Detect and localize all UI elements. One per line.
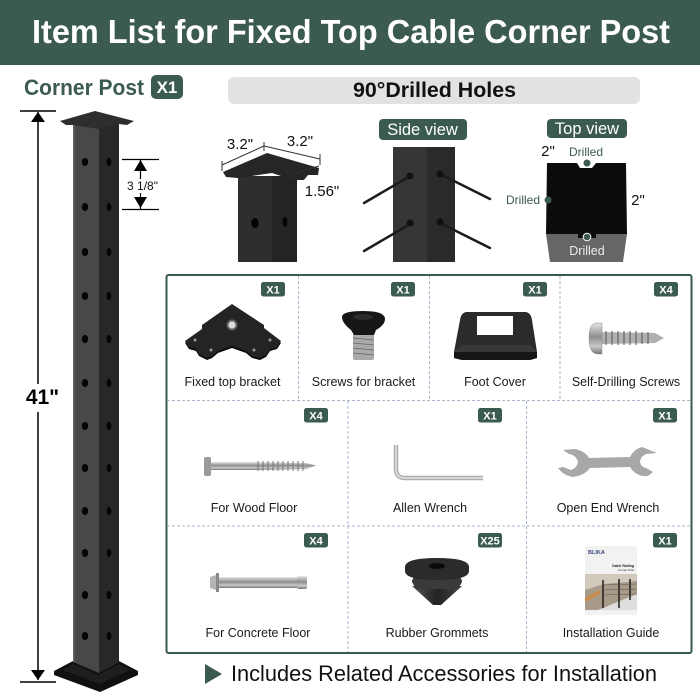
item: installation guide: X1 (658, 536, 672, 548)
top view: Top view (555, 120, 619, 138)
item: allen wrench (393, 408, 502, 515)
item: screws for bracket (312, 282, 416, 389)
item: installation guide: Installation Guide (563, 626, 659, 640)
title banner (0, 0, 700, 65)
item: screws for bracket: X1 (396, 284, 410, 296)
item: rubber grommets (386, 533, 502, 640)
dimension: 3 1/8 inch hole spacing: 3 1/8" (127, 179, 158, 193)
item: fixed top bracket (185, 282, 285, 389)
top view (506, 119, 645, 262)
item: rubber grommets: Rubber Grommets (386, 626, 488, 640)
top view: 2" (541, 143, 555, 160)
item: installation guide: BLIKA (588, 550, 605, 556)
side view (364, 119, 490, 262)
item: self-drilling screws: Self-Drilling Screws (572, 375, 680, 389)
footer note with arrow: Includes Related Accessories for Installation (231, 661, 657, 686)
item: concrete floor anchor: For Concrete Floor (206, 626, 310, 640)
item: allen wrench: Allen Wrench (393, 501, 467, 515)
bracket detail with dimensions: 3.2" (227, 136, 253, 153)
item: allen wrench: X1 (483, 410, 497, 422)
top view: Drilled (569, 244, 605, 258)
item: foot cover: X1 (528, 284, 542, 296)
item: self-drilling screws: X4 (659, 284, 674, 296)
item: screws for bracket: Screws for bracket (312, 375, 416, 389)
dimension: 3 1/8 inch hole spacing (122, 160, 161, 210)
side view: Side view (387, 121, 458, 139)
bracket detail with dimensions (222, 133, 339, 262)
heading: corner post: X1 (157, 78, 177, 97)
top view: Drilled (569, 145, 603, 159)
item: open end wrench (557, 408, 677, 515)
bracket detail with dimensions: 3.2" (287, 133, 313, 150)
item: open end wrench: Open End Wrench (557, 501, 659, 515)
panel: accessories grid (166, 275, 692, 653)
top view: Drilled (506, 193, 540, 207)
item: rubber grommets: X25 (480, 536, 500, 548)
item: installation guide: Cable Railing (612, 564, 634, 568)
item: self-drilling screws (572, 282, 680, 389)
item: open end wrench: X1 (658, 410, 672, 422)
heading bar: drilled holes: 90°Drilled Holes (353, 79, 516, 102)
corner post drawing (54, 111, 138, 692)
heading: corner post: Corner Post (24, 75, 145, 100)
item: wood floor lag screw: X4 (309, 410, 324, 422)
item: foot cover: Foot Cover (464, 375, 526, 389)
item: fixed top bracket: Fixed top bracket (185, 375, 281, 389)
item: concrete floor anchor (206, 533, 328, 640)
item: wood floor lag screw: For Wood Floor (211, 501, 297, 515)
item: foot cover (454, 282, 547, 389)
heading bar: drilled holes (228, 77, 640, 104)
dimension: 41 inch height (20, 111, 62, 682)
bracket detail with dimensions: 1.56" (305, 183, 339, 200)
top view: 2" (631, 192, 645, 209)
item: fixed top bracket: X1 (266, 284, 280, 296)
item: installation guide (563, 533, 677, 640)
item: wood floor lag screw (204, 408, 328, 515)
item: installation guide: Corner Post (618, 568, 634, 572)
dimension: 41 inch height: 41" (26, 386, 59, 409)
item: concrete floor anchor: X4 (309, 536, 324, 548)
title banner: Item List for Fixed Top Cable Corner Post (32, 13, 670, 50)
